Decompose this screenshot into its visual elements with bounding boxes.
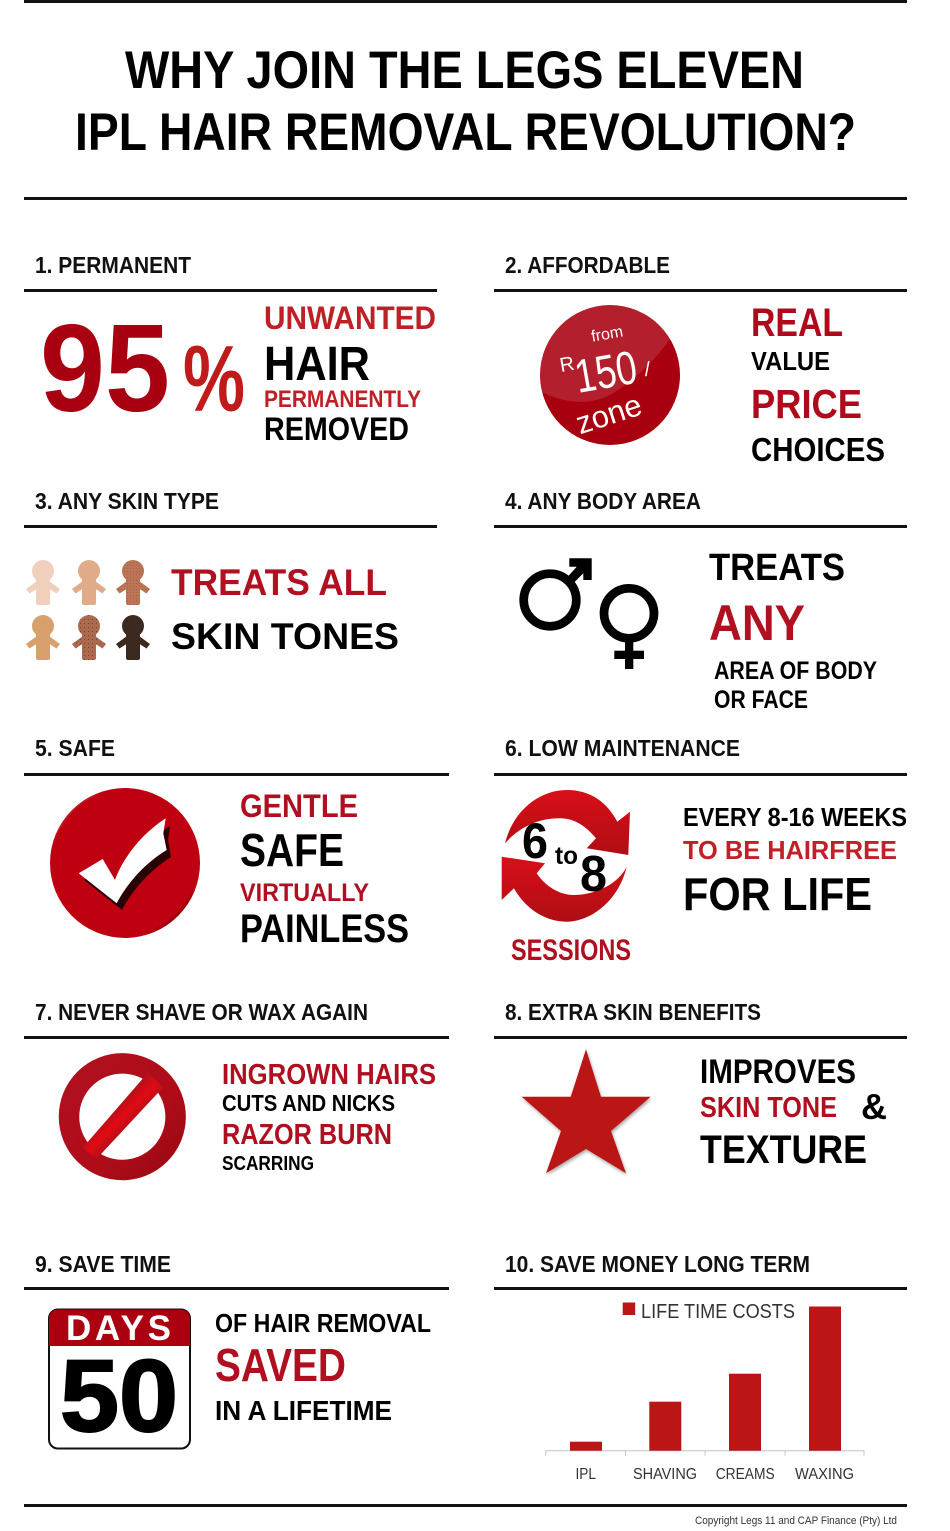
icon: 6 to 8 sessions cycle: 8	[580, 845, 607, 902]
bottom rule	[24, 1504, 907, 1507]
text: real value price choices	[751, 301, 885, 468]
copyright: Copyright Legs 11 and CAP Finance (Pty) Ltd	[695, 1515, 897, 1527]
icon: price badge: from	[590, 323, 624, 346]
panel: 1 permanent	[24, 252, 437, 447]
text: ingrown hairs cuts and nicks razor burn scarring: RAZOR BURN	[222, 1119, 392, 1151]
panel: 5 safe	[24, 735, 449, 951]
panel: 2 affordable	[494, 252, 907, 468]
text: improves skin tone and texture: TEXTURE	[700, 1128, 867, 1172]
icon: 50 days calendar: DAYS	[66, 1309, 171, 1348]
text: improves skin tone and texture: &	[861, 1086, 887, 1127]
text: every 8-16 weeks to be hairfree for life: EVERY 8-16 WEEKS	[683, 802, 907, 832]
panel: 10 save money long term	[494, 1251, 907, 1483]
bar chart: life time costs: SHAVING	[633, 1466, 697, 1483]
text: gentle safe virtually painless: GENTLE	[240, 788, 358, 824]
text: gentle safe virtually painless: VIRTUALLY	[240, 879, 369, 907]
text: treats any area of body or face: TREATS	[709, 547, 845, 589]
text: unwanted hair permanently removed: REMOVED	[264, 411, 409, 447]
heading: safe: 5. SAFE	[35, 735, 115, 761]
panel: 3 any skin type	[24, 488, 437, 660]
icon: price badge: /	[644, 359, 651, 381]
bar chart: life time costs: LIFE TIME COSTS	[641, 1301, 795, 1323]
heading: any body area: 4. ANY BODY AREA	[505, 488, 701, 514]
title: WHY JOIN THE LEGS ELEVEN	[125, 41, 804, 100]
heading: any skin type: 3. ANY SKIN TYPE	[35, 488, 219, 514]
bar chart: life time costs	[546, 1301, 864, 1483]
text: real value price choices: VALUE	[751, 346, 830, 376]
text: ingrown hairs cuts and nicks razor burn scarring	[222, 1059, 436, 1175]
heading: save time: 9. SAVE TIME	[35, 1251, 171, 1277]
text: improves skin tone and texture	[700, 1053, 887, 1172]
text: treats any area of body or face: ANY	[709, 595, 805, 651]
heading: low maintenance: 6. LOW MAINTENANCE	[505, 735, 740, 761]
panel: 7 never shave or wax again	[24, 999, 449, 1175]
text: ingrown hairs cuts and nicks razor burn scarring: CUTS AND NICKS	[222, 1090, 395, 1116]
text: real value price choices: CHOICES	[751, 431, 885, 468]
icon: 6 to 8 sessions cycle: to	[555, 842, 578, 870]
icon: red star	[522, 1049, 651, 1173]
text: unwanted hair permanently removed	[264, 300, 436, 447]
heading: permanent: 1. PERMANENT	[35, 252, 191, 278]
icon: 6 to 8 sessions cycle	[502, 790, 630, 922]
text: treats any area of body or face: OR FACE	[714, 686, 808, 714]
text: improves skin tone and texture: SKIN TONE	[700, 1092, 837, 1124]
text: gentle safe virtually painless: SAFE	[240, 824, 344, 876]
bar chart: life time costs: CREAMS	[716, 1466, 775, 1483]
icon: price badge: R	[558, 353, 576, 377]
title rule	[24, 197, 907, 200]
icon: six skin tone figures	[26, 560, 150, 660]
icon: prohibition sign	[69, 1063, 176, 1170]
stat: 95%: %	[183, 326, 245, 431]
stat: 95%	[40, 300, 245, 438]
text: unwanted hair permanently removed: HAIR	[264, 338, 370, 391]
text: ingrown hairs cuts and nicks razor burn scarring: SCARRING	[222, 1153, 314, 1175]
top rule	[24, 0, 907, 3]
text: of hair removal saved in a lifetime: IN A LIFETIME	[215, 1395, 392, 1426]
text: treats all skin tones: TREATS ALL	[171, 562, 387, 603]
title: IPL HAIR REMOVAL REVOLUTION?	[75, 103, 856, 162]
text: ingrown hairs cuts and nicks razor burn scarring: INGROWN HAIRS	[222, 1059, 436, 1091]
text: real value price choices: REAL	[751, 301, 843, 345]
icon: 6 to 8 sessions cycle: 6	[522, 813, 548, 869]
label: sessions: SESSIONS	[511, 934, 631, 967]
text: treats all skin tones	[171, 562, 399, 657]
text: unwanted hair permanently removed: UNWANTED	[264, 300, 436, 336]
text: unwanted hair permanently removed: PERMANENTLY	[264, 386, 421, 413]
text: real value price choices: PRICE	[751, 381, 862, 427]
text: gentle safe virtually painless: PAINLESS	[240, 907, 409, 951]
heading: affordable: 2. AFFORDABLE	[505, 252, 670, 278]
text: every 8-16 weeks to be hairfree for life	[683, 802, 907, 920]
panel: 6 low maintenance	[494, 735, 907, 967]
text: of hair removal saved in a lifetime	[215, 1308, 431, 1426]
icon: price badge: 150	[571, 340, 641, 403]
panel: 9 save time	[24, 1251, 449, 1453]
heading: save money long term: 10. SAVE MONEY LONG TERM	[505, 1251, 810, 1277]
heading: never shave or wax again: 7. NEVER SHAVE OR WAX AGAIN	[35, 999, 368, 1025]
panel: 4 any body area	[494, 488, 907, 714]
icon: male and female symbols	[524, 558, 654, 669]
text: gentle safe virtually painless	[240, 788, 409, 951]
text: every 8-16 weeks to be hairfree for life: FOR LIFE	[683, 868, 872, 920]
bar chart: life time costs: IPL	[576, 1466, 596, 1483]
stat: 95%: 95	[40, 300, 170, 438]
text: treats all skin tones: SKIN TONES	[171, 616, 399, 657]
icon: 50 days calendar	[49, 1309, 190, 1453]
text: improves skin tone and texture: IMPROVES	[700, 1053, 856, 1091]
icon: price badge: zone	[571, 387, 646, 441]
title	[75, 41, 856, 162]
text: of hair removal saved in a lifetime: OF HAIR REMOVAL	[215, 1308, 431, 1338]
icon: 50 days calendar: 50	[60, 1339, 178, 1453]
panel: 8 extra skin benefits	[494, 999, 907, 1173]
text: every 8-16 weeks to be hairfree for life: TO BE HAIRFREE	[683, 835, 897, 865]
icon: check mark badge	[50, 788, 200, 938]
icon: price badge	[535, 295, 680, 445]
text: treats any area of body or face: AREA OF BODY	[714, 657, 877, 685]
bar chart: life time costs: WAXING	[795, 1466, 854, 1483]
text: of hair removal saved in a lifetime: SAVED	[215, 1339, 346, 1391]
heading: extra skin benefits: 8. EXTRA SKIN BENEFITS	[505, 999, 761, 1025]
text: treats any area of body or face	[709, 547, 877, 714]
